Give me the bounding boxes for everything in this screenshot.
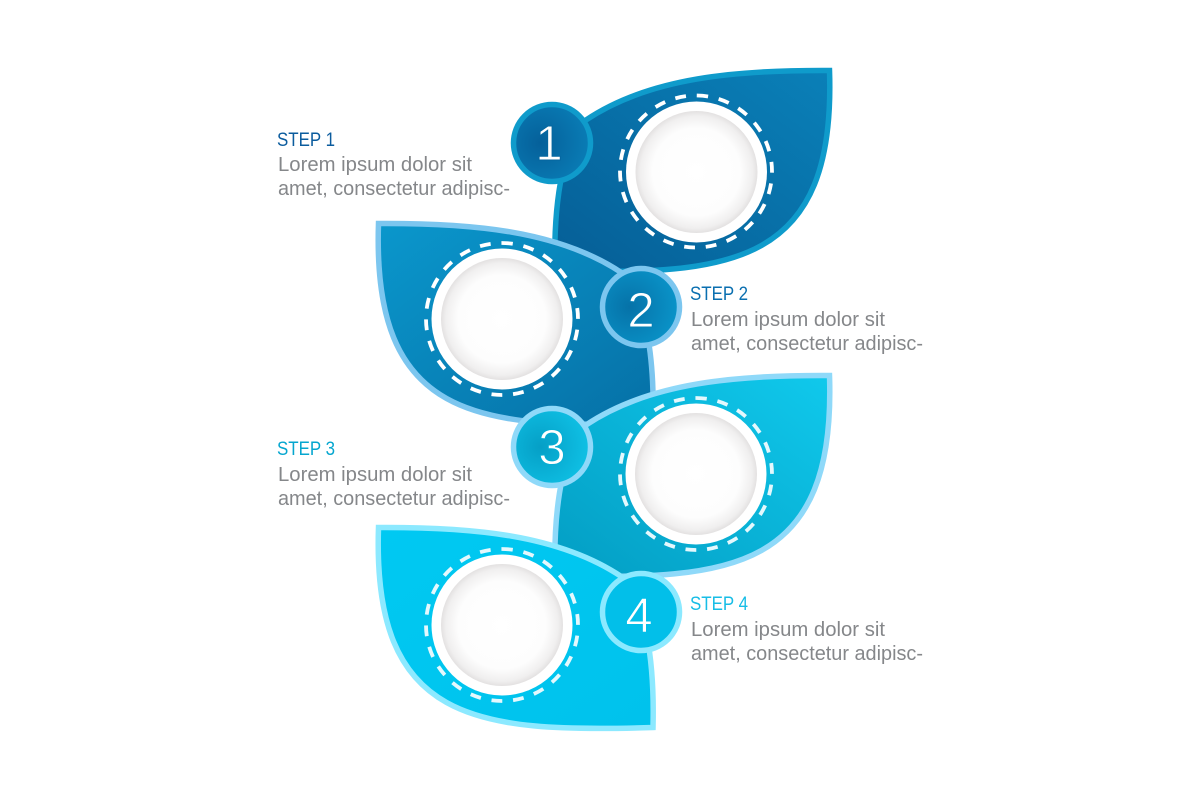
text block: step 1: Lorem ipsum dolor sit: [278, 153, 472, 176]
badge 4: [602, 574, 680, 650]
leaf 4 dashed ring: [426, 549, 578, 701]
text block: step 3: amet, consectetur adipisc-: [278, 487, 510, 510]
leaf 1 dashed ring: [619, 94, 773, 249]
text block: step 2: Lorem ipsum dolor sit: [691, 308, 885, 331]
leaf 1 white disc: [626, 102, 767, 242]
badge 1: 1: [535, 117, 563, 171]
badge 3: [514, 408, 590, 486]
panel: leaf 2: [378, 223, 653, 424]
text block: step 4: STEP 4: [690, 593, 748, 615]
text block: step 1: [277, 129, 510, 200]
badge 3: 3: [538, 421, 566, 475]
badge 2: [602, 268, 680, 346]
text block: step 2: STEP 2: [690, 283, 748, 305]
badge 4: 4: [625, 589, 653, 643]
panel: leaf 1: [555, 70, 830, 271]
text block: step 3: STEP 3: [277, 438, 335, 460]
leaf 3 dashed ring: [620, 398, 772, 550]
badge 2: 2: [627, 284, 655, 338]
leaf 3 white disc: [626, 404, 766, 544]
panel: leaf 4: [378, 527, 653, 728]
text block: step 1: amet, consectetur adipisc-: [278, 177, 510, 200]
text block: step 2: amet, consectetur adipisc-: [691, 332, 923, 355]
leaf 2 shape: [378, 223, 653, 424]
text block: step 3: Lorem ipsum dolor sit: [278, 463, 472, 486]
badge 1: [514, 104, 590, 182]
text block: step 3: [277, 438, 510, 510]
text block: step 4: amet, consectetur adipisc-: [691, 642, 923, 665]
leaf 1 shape: [555, 70, 830, 271]
leaf 2 white disc: [432, 248, 572, 390]
leaf 2 dashed ring: [426, 243, 578, 395]
leaf 4 shape: [378, 527, 653, 728]
text block: step 1: STEP 1: [277, 129, 335, 151]
text block: step 4: [690, 593, 923, 665]
leaf 4 white disc: [432, 554, 572, 696]
text block: step 4: Lorem ipsum dolor sit: [691, 618, 885, 641]
leaf 3 shape: [555, 375, 830, 576]
panel: leaf 3: [555, 375, 830, 576]
text block: step 2: [690, 283, 923, 355]
